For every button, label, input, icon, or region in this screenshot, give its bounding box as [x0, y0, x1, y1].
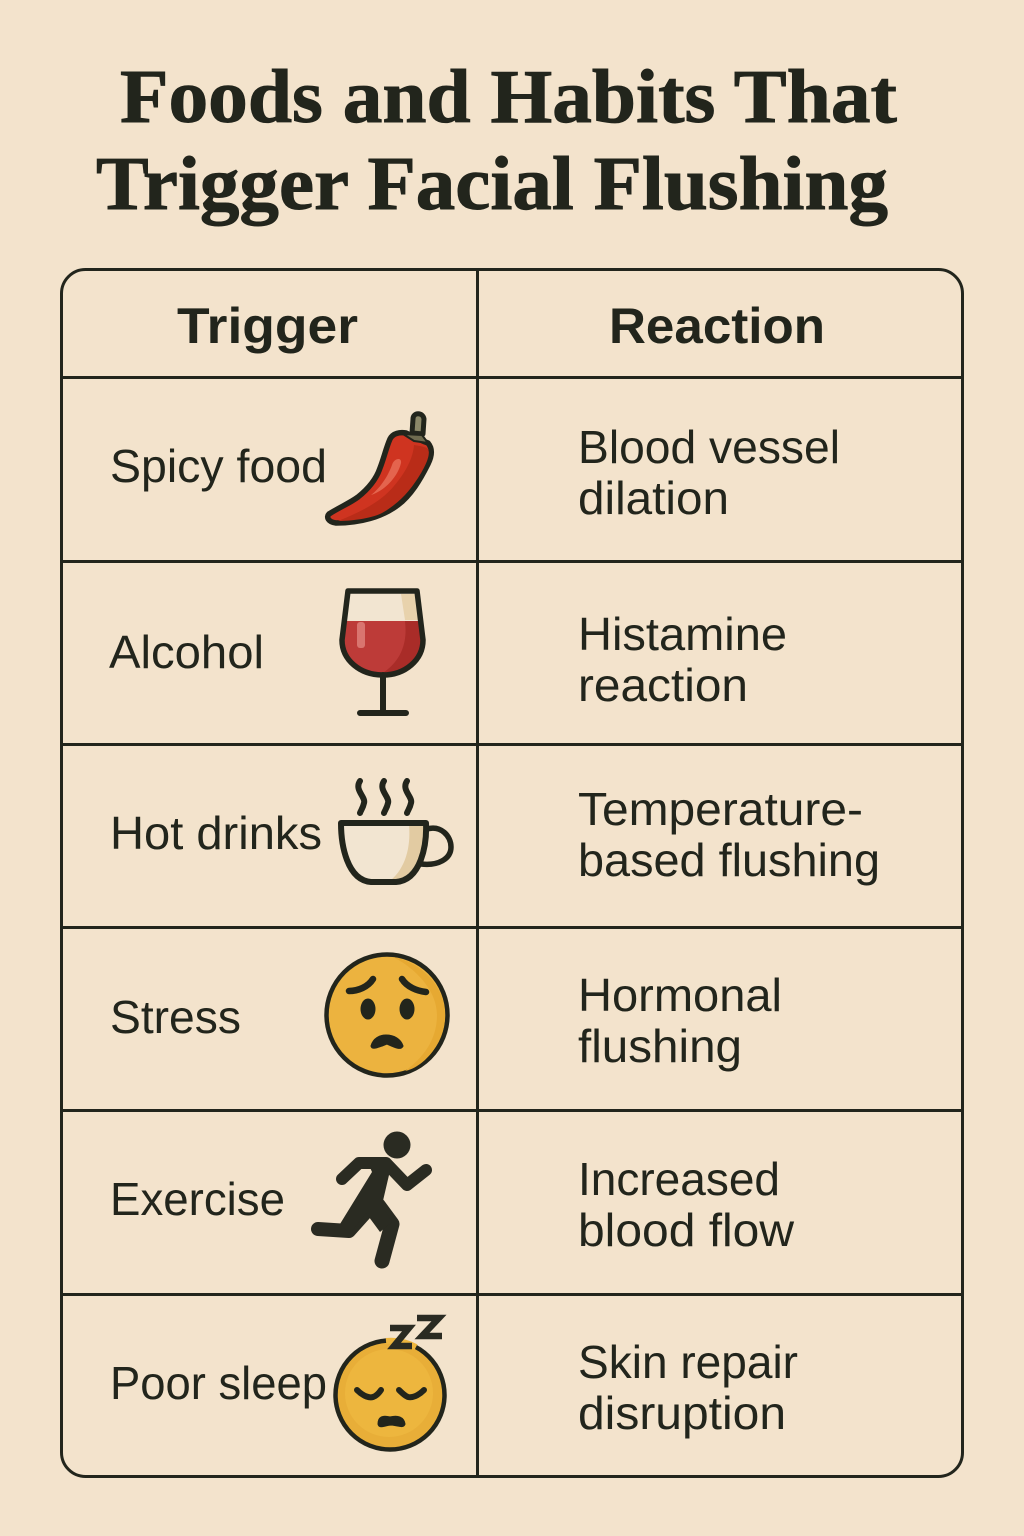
icon: running figure: [318, 1132, 426, 1261]
reaction: hormonal flushing: Hormonal: [578, 969, 782, 1021]
icon: Z letters: [390, 1318, 442, 1346]
row: alcohol: Alcohol: [109, 626, 264, 678]
row: exercise: [110, 1132, 426, 1261]
row: stress: Stress: [110, 991, 241, 1043]
reaction: skin repair disruption: [578, 1336, 798, 1439]
reaction: temperature-based flushing: based flushing: [578, 834, 880, 886]
reaction: blood vessel dilation: Blood vessel: [578, 421, 840, 473]
row: poor sleep: Poor sleep: [110, 1357, 327, 1409]
header: Reaction: Reaction: [609, 298, 825, 354]
reaction: skin repair disruption: Skin repair: [578, 1336, 798, 1388]
table frame: [61, 269, 963, 1477]
row: spicy food: [110, 414, 431, 523]
reaction: histamine reaction: Histamine: [578, 608, 787, 660]
reaction: hormonal flushing: flushing: [578, 1020, 742, 1072]
row: spicy food: Spicy food: [110, 440, 327, 492]
reaction: histamine reaction: reaction: [578, 659, 748, 711]
row: hot drinks: [110, 781, 451, 882]
reaction: temperature-based flushing: [578, 783, 880, 886]
title: Trigger Facial Flushing: [96, 142, 888, 226]
row: exercise: Exercise: [110, 1173, 285, 1225]
icon: steaming cup: [341, 781, 451, 882]
reaction: hormonal flushing: [578, 969, 782, 1072]
reaction: increased blood flow: blood flow: [578, 1204, 795, 1256]
row: stress: [110, 954, 448, 1076]
reaction: blood vessel dilation: dilation: [578, 472, 729, 524]
header: Trigger: Trigger: [177, 298, 358, 354]
icon: sleeping face: [336, 1318, 444, 1450]
title: [96, 55, 897, 226]
reaction: increased blood flow: [578, 1153, 795, 1256]
icon: worried face: [326, 954, 448, 1076]
row: alcohol: [109, 591, 423, 713]
reaction: temperature-based flushing: Temperature-: [578, 783, 863, 835]
reaction: histamine reaction: [578, 608, 787, 711]
icon: wine glass: [342, 591, 423, 713]
icon: chili pepper: [328, 414, 431, 523]
reaction: increased blood flow: Increased: [578, 1153, 780, 1205]
row: hot drinks: Hot drinks: [110, 807, 322, 859]
reaction: skin repair disruption: disruption: [578, 1387, 786, 1439]
table: [61, 269, 963, 1477]
reaction: blood vessel dilation: [578, 421, 840, 524]
title: Foods and Habits That: [120, 55, 897, 139]
row: poor sleep: [110, 1318, 444, 1450]
